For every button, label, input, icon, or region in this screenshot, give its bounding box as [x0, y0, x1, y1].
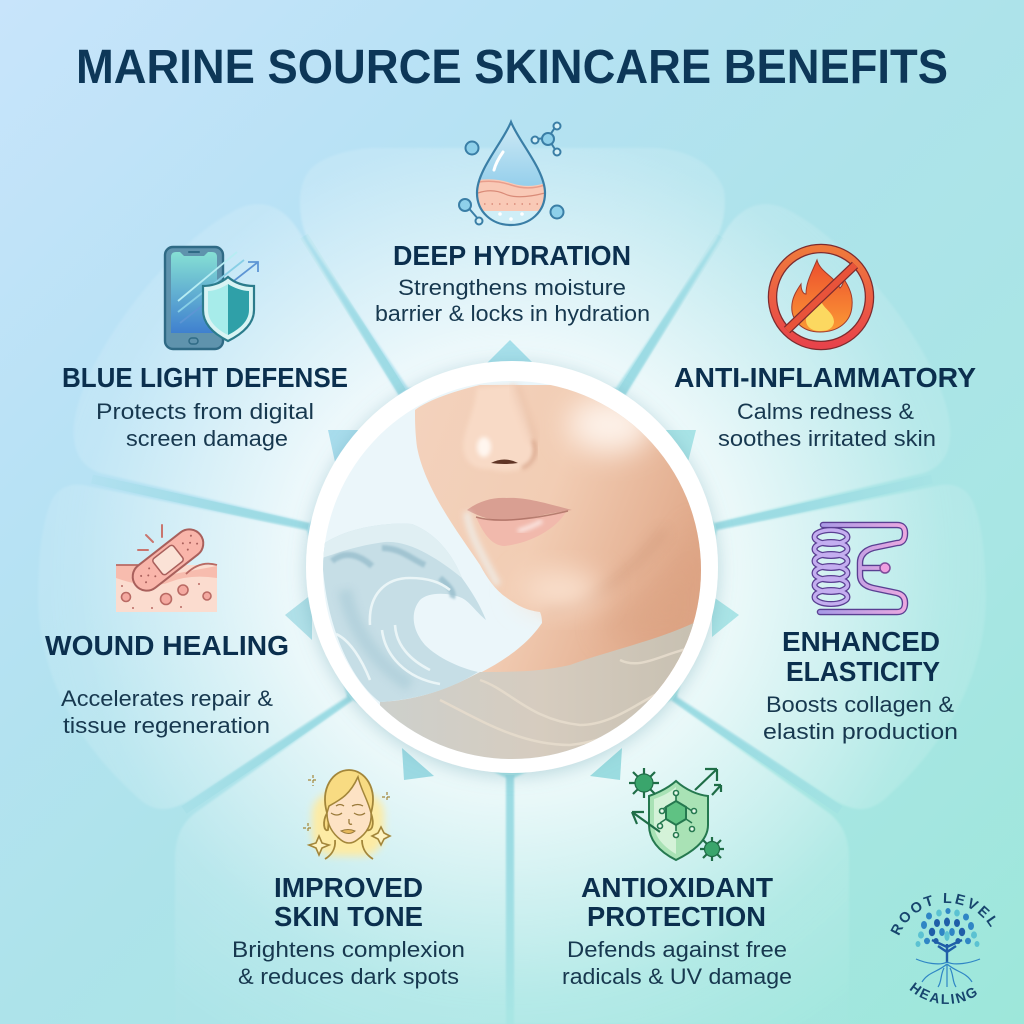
- heading: IMPROVED: [274, 872, 423, 903]
- panel: blue light defense: [62, 204, 400, 523]
- icon: water drop with skin layers: [459, 122, 564, 230]
- face and neck: [415, 385, 720, 700]
- panel: enhanced elasticity: [677, 485, 986, 809]
- heading: PROTECTION: [587, 901, 766, 932]
- heading: ENHANCED: [782, 626, 940, 657]
- description: Strengthens moisture: [398, 275, 626, 300]
- heading: ANTI-INFLAMMATORY: [674, 362, 976, 393]
- icon: crossed-out flame: [772, 248, 870, 346]
- heading: ELASTICITY: [786, 656, 940, 687]
- description: radicals & UV damage: [562, 964, 792, 989]
- logo lower text: HEALING: [910, 982, 977, 1004]
- petal: improved skin tone: [175, 700, 506, 1024]
- nose: [463, 385, 533, 471]
- petal: wound healing: [38, 485, 347, 809]
- icon: glowing face: [303, 770, 392, 859]
- center image: face and wave: [306, 361, 720, 773]
- icon: phone and shield: [165, 247, 258, 349]
- logo tree: [916, 908, 980, 987]
- description: Boosts collagen &: [766, 692, 954, 717]
- petal: anti-inflammatory: [624, 204, 950, 523]
- wave: [322, 524, 486, 702]
- description: Brightens complexion: [232, 937, 465, 962]
- petal: antioxidant protection: [514, 700, 849, 1024]
- pointer triangles: [285, 340, 739, 780]
- description: screen damage: [126, 426, 288, 451]
- heading: ANTIOXIDANT: [581, 872, 773, 903]
- title: MARINE SOURCE SKINCARE BENEFITS: [76, 41, 948, 94]
- icon: bandage on skin: [116, 524, 217, 612]
- description: soothes irritated skin: [718, 426, 936, 451]
- panel: improved skin tone: [175, 700, 506, 1024]
- petal: blue light defense: [74, 204, 400, 523]
- description: Defends against free: [567, 937, 787, 962]
- icon: antioxidant shield: [629, 768, 724, 861]
- panel: wound healing: [38, 485, 347, 809]
- beige water: [380, 623, 694, 759]
- logo arc text: ROOT LEVEL: [890, 893, 996, 936]
- icon: collagen spring: [814, 525, 905, 612]
- panel: deep hydration: [300, 122, 725, 388]
- lips: [467, 498, 572, 522]
- description: elastin production: [763, 719, 958, 744]
- heading: DEEP HYDRATION: [393, 240, 631, 271]
- description: Calms redness &: [737, 399, 914, 424]
- petal: enhanced elasticity: [677, 485, 986, 809]
- description: Protects from digital: [96, 399, 314, 424]
- description: barrier & locks in hydration: [375, 301, 650, 326]
- description: Accelerates repair &: [61, 686, 273, 711]
- pale water along the mouth: [467, 512, 498, 585]
- petal: deep hydration: [300, 148, 725, 388]
- logo: Root Level Healing: [890, 893, 996, 1004]
- description: tissue regeneration: [63, 713, 270, 738]
- description: & reduces dark spots: [238, 964, 459, 989]
- heading: WOUND HEALING: [45, 630, 289, 661]
- heading: SKIN TONE: [274, 901, 423, 932]
- panel: antioxidant protection: [514, 700, 849, 1024]
- panel: anti-inflammatory: [624, 204, 976, 523]
- heading: BLUE LIGHT DEFENSE: [62, 362, 348, 393]
